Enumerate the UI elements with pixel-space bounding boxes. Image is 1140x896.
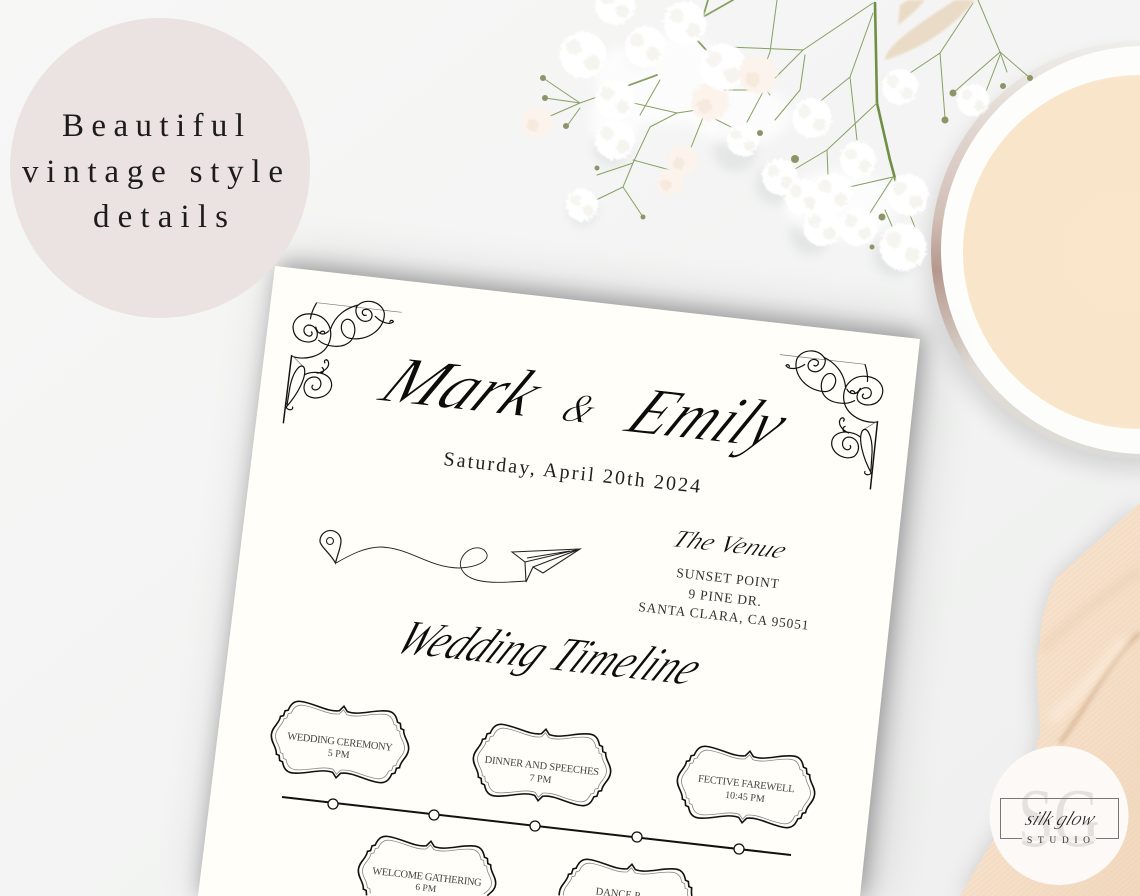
venue block: 9 PINE DR.: [688, 586, 762, 609]
icon: location pin and paper plane route: [320, 530, 580, 582]
callout badge: [10, 18, 310, 318]
date: Saturday, April 20th 2024: [442, 448, 701, 498]
cup shadow: [927, 54, 1140, 470]
gypsophila flowers: [522, 0, 989, 270]
venue block: SUNSET POINT: [676, 565, 780, 591]
venue block: [638, 525, 809, 633]
flower stems: [543, 0, 1030, 240]
venue block: The Venue: [667, 525, 793, 564]
event badge: dinner and speeches: [469, 722, 615, 808]
corner ornament: top left: [283, 301, 402, 423]
event badge: welcome gathering: 6 PM: [415, 883, 437, 895]
event badge: fective farewell: [673, 744, 819, 830]
paper edge shadow: [200, 262, 924, 896]
paper wide shadow: [205, 262, 930, 896]
event badge: dinner and speeches: 7 PM: [529, 773, 552, 786]
event badge: dance party: [559, 857, 695, 896]
title: couple names: [366, 343, 805, 461]
title: couple names: &: [552, 384, 609, 432]
cup: [931, 41, 1140, 459]
wedding itinerary paper: [198, 266, 920, 896]
heading: wedding timeline: Wedding Timeline: [385, 611, 714, 695]
callout badge: Beautiful: [62, 108, 244, 144]
logo: silk glow studio: SG: [1018, 772, 1100, 865]
event badge: wedding ceremony: [267, 699, 413, 785]
title: couple names: Mark: [366, 343, 560, 431]
timeline line with dots: [282, 797, 791, 855]
title: couple names: Emily: [612, 374, 805, 461]
event badge: dinner and speeches: DINNER AND SPEECHES: [484, 755, 600, 778]
logo: silk glow studio: silk glow: [1022, 808, 1099, 830]
callout badge: details: [93, 199, 228, 235]
logo: silk glow studio: STUDIO: [1027, 836, 1090, 846]
event badge: fective farewell: FECTIVE FAREWELL: [697, 774, 795, 795]
venue block: SANTA CLARA, CA 95051: [638, 599, 809, 633]
event badge: fective farewell: 10:45 PM: [724, 790, 765, 805]
logo: silk glow studio: [990, 746, 1128, 885]
soft background blossom haze: [590, 35, 895, 240]
event badge: wedding ceremony: WEDDING CEREMONY: [287, 731, 394, 754]
callout badge: vintage style: [22, 154, 283, 190]
corner ornament: top right: [755, 344, 898, 489]
flowers shadows: [569, 37, 917, 277]
flower buds: [540, 75, 1033, 250]
event badge: welcome gathering: [356, 834, 500, 896]
cloth: [960, 503, 1140, 896]
event badge: welcome gathering: WELCOME GATHERING: [372, 866, 483, 889]
event badge: wedding ceremony: 5 PM: [327, 748, 350, 761]
dried pampas: [885, 0, 975, 60]
